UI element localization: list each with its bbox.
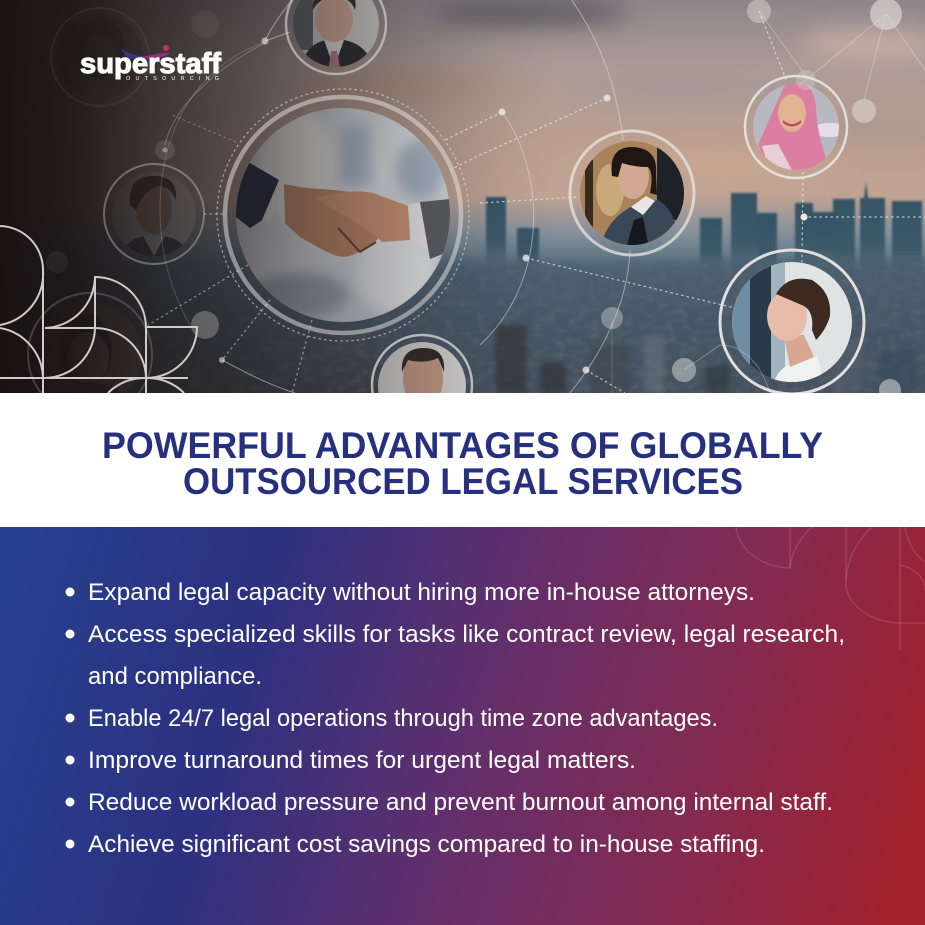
- city ground: [304, 260, 925, 393]
- logo: superstaff outsourcing: superstaff: [80, 48, 221, 80]
- bullet text: Reduce workload pressure and prevent burnout among internal staff.: [88, 789, 833, 816]
- photo: woman bottom left: [91, 314, 142, 393]
- node dots: [46, 0, 902, 401]
- panel: advantages list: [0, 527, 925, 925]
- photo: man with dark hair: [578, 140, 687, 248]
- bullet text: and compliance.: [88, 663, 262, 690]
- dark left overlay: [0, 0, 506, 393]
- photo: handshake: [230, 105, 456, 327]
- bullet text: Improve turnaround times for urgent legal matters.: [88, 747, 636, 774]
- bullet text: Expand legal capacity without hiring more in-house attorneys.: [88, 579, 755, 606]
- network connections: [160, 0, 925, 393]
- dashed links: [148, 11, 925, 393]
- decorative corner motif: [736, 527, 925, 650]
- city skyline: [484, 182, 924, 265]
- logo: superstaff outsourcing: OUTSOURCING: [126, 76, 219, 82]
- heading: POWERFUL ADVANTAGES OF GLOBALLY: [102, 425, 823, 466]
- photo: man bottom: [378, 342, 466, 393]
- photo: woman in pink hijab: [753, 84, 839, 170]
- sky and clouds: [0, 0, 925, 393]
- bullet text: Achieve significant cost savings compared to in-house staffing.: [88, 831, 765, 858]
- photo: woman top left: [104, 22, 124, 98]
- bullet text: [88, 579, 845, 858]
- heading: OUTSOURCED LEGAL SERVICES: [183, 461, 743, 502]
- photo: man left: [116, 172, 196, 256]
- heading: [102, 425, 823, 502]
- title band: [0, 393, 925, 527]
- geometric outline motif: [0, 226, 197, 393]
- photo: man top: [293, 0, 379, 67]
- photo: woman with short hair: [730, 260, 854, 386]
- bullet text: Access specialized skills for tasks like contract review, legal research,: [88, 621, 845, 648]
- hero photo banner: [0, 0, 925, 435]
- bullet markers: [66, 588, 74, 848]
- portrait rings: [28, 0, 864, 435]
- bullet text: Enable 24/7 legal operations through time zone advantages.: [88, 705, 718, 732]
